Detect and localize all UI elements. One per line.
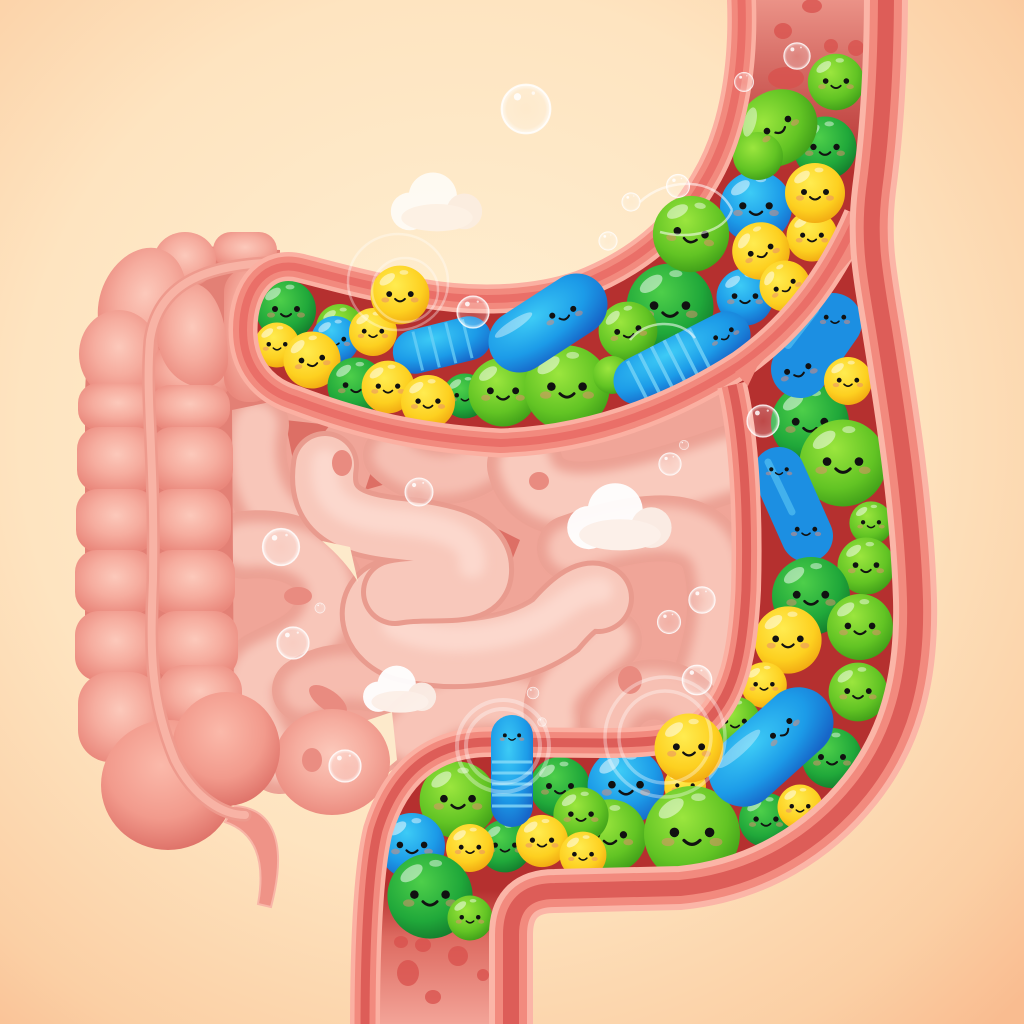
dark green centre — [479, 820, 531, 872]
yellow microbe — [785, 163, 845, 223]
blue ribbed worm vertical — [491, 715, 533, 827]
cloud top — [391, 173, 482, 231]
bubble — [666, 174, 690, 198]
loop lower left — [305, 677, 425, 695]
green lower — [468, 358, 538, 426]
bubble — [682, 665, 712, 695]
bubble — [784, 43, 810, 69]
green — [838, 538, 894, 594]
yellow centre — [516, 815, 568, 867]
bubble — [277, 627, 309, 659]
bubble — [689, 587, 715, 613]
blue microbe — [588, 748, 664, 824]
bubble — [538, 718, 546, 726]
green big descending — [800, 420, 886, 506]
cream gap lower — [362, 712, 397, 770]
clouds — [363, 173, 672, 713]
caecum — [101, 692, 280, 850]
bubble — [329, 750, 361, 782]
green bean microbe — [721, 74, 833, 182]
yellow behind — [664, 765, 706, 807]
cloud lower — [363, 666, 436, 713]
yellow microbe over wall — [371, 266, 429, 324]
loop top right — [525, 462, 735, 499]
main coil lower — [376, 590, 600, 653]
yellow big — [654, 714, 724, 782]
blue capsule over wall — [477, 262, 619, 384]
loop bottom centre — [410, 700, 545, 735]
wall: diagonal junction — [735, 225, 860, 386]
green round — [573, 799, 647, 873]
dark gaps between loops — [232, 398, 560, 565]
haustra top — [79, 232, 277, 402]
yellow left — [254, 322, 300, 368]
yellow right — [778, 784, 822, 830]
green small front — [553, 787, 609, 843]
swirl rings — [348, 184, 732, 797]
yellow microbe mid — [724, 214, 798, 288]
green bottom small — [448, 896, 492, 940]
loop top centre — [392, 455, 490, 475]
loop upper left — [253, 425, 305, 532]
yellow lower — [362, 361, 414, 413]
microbes: upper right tube — [626, 54, 864, 351]
ring lower right — [605, 677, 725, 797]
small intestine — [222, 385, 760, 815]
dark green — [772, 557, 850, 635]
yellow front left — [280, 328, 344, 392]
cloud middle — [567, 483, 672, 550]
haustra rows — [75, 383, 242, 762]
intestine spots — [284, 450, 642, 721]
small green node — [593, 356, 631, 394]
appendix — [225, 806, 278, 907]
bubble — [405, 478, 433, 506]
taenia band — [149, 262, 300, 815]
yellow small — [741, 662, 787, 708]
dark green left — [256, 280, 316, 340]
ring top left — [348, 234, 448, 330]
blue large capsule — [694, 673, 848, 821]
bubble — [734, 72, 754, 92]
blue capsule upper — [779, 310, 850, 382]
microbes: right descending tube — [710, 310, 894, 788]
yellow centre low — [560, 832, 606, 878]
yellow descending — [824, 357, 872, 405]
green microbe top — [808, 54, 864, 110]
bubble large top — [502, 85, 550, 133]
lumen dots bottom — [394, 936, 489, 1004]
blue small — [716, 268, 774, 326]
green microbe large — [648, 191, 734, 277]
yellow small — [349, 308, 397, 356]
blue microbe — [720, 171, 792, 243]
yellow — [754, 606, 822, 674]
bubble — [599, 232, 617, 250]
wall: lower tube top — [365, 385, 747, 1024]
cream gap left — [322, 541, 358, 582]
bubble — [657, 610, 681, 634]
back loops — [245, 425, 735, 760]
bubbles — [263, 43, 810, 782]
loop far bottom right — [610, 689, 690, 720]
green — [827, 594, 893, 660]
green behind worm — [594, 297, 662, 365]
ring upper right — [640, 184, 732, 235]
green small lower — [710, 696, 760, 748]
wall: inner bend and transverse — [243, 0, 858, 443]
bubble — [315, 603, 325, 613]
ring worm — [457, 700, 549, 792]
dark green lower — [802, 728, 862, 788]
lower left loop ball — [274, 709, 390, 815]
blue left — [379, 813, 445, 879]
bubble — [263, 529, 299, 565]
blue ribbed worm — [388, 312, 496, 378]
bubble — [747, 405, 779, 437]
dark green centre — [626, 264, 714, 350]
green big — [524, 345, 610, 431]
intestine base — [222, 385, 760, 810]
wall: right outer — [511, 0, 915, 1024]
microbes: lower tube — [379, 673, 848, 940]
bubble — [659, 453, 681, 475]
loop bottom right — [554, 640, 612, 722]
green small — [849, 501, 893, 545]
dark green right — [739, 793, 793, 847]
blue capsule middle — [766, 462, 821, 536]
green pale — [316, 304, 364, 352]
bubble — [527, 687, 539, 699]
blue left — [311, 316, 359, 364]
dark green microbe — [794, 116, 856, 180]
yellow microbe low — [751, 252, 819, 320]
dark green low — [328, 358, 384, 414]
blue ribbed worm right — [605, 303, 759, 413]
yellow centre left — [446, 824, 494, 872]
bubble — [622, 193, 640, 211]
loop right — [570, 528, 720, 695]
yellow lower front — [401, 375, 455, 429]
dark green back — [530, 757, 590, 817]
microbes drawn over the wall — [371, 191, 734, 827]
bubble — [457, 296, 489, 328]
lumen: lower tube — [365, 215, 915, 1024]
green big front — [644, 786, 740, 882]
dark green bottom left — [387, 853, 473, 939]
large intestine: ascending colon — [75, 232, 300, 907]
yellow behind — [786, 210, 838, 262]
microbes: transverse tube — [254, 280, 759, 431]
lumen: upper tube — [243, 0, 886, 443]
colon base — [85, 245, 280, 730]
dark green mid — [442, 374, 488, 418]
lumen dots top — [768, 0, 864, 89]
dark green descending — [771, 384, 849, 462]
green — [829, 663, 887, 721]
ball spot — [302, 748, 322, 772]
green left — [420, 762, 496, 838]
main coil upper — [324, 462, 480, 592]
loop left — [245, 544, 330, 760]
bubble — [679, 440, 689, 450]
ring centre — [630, 324, 695, 340]
